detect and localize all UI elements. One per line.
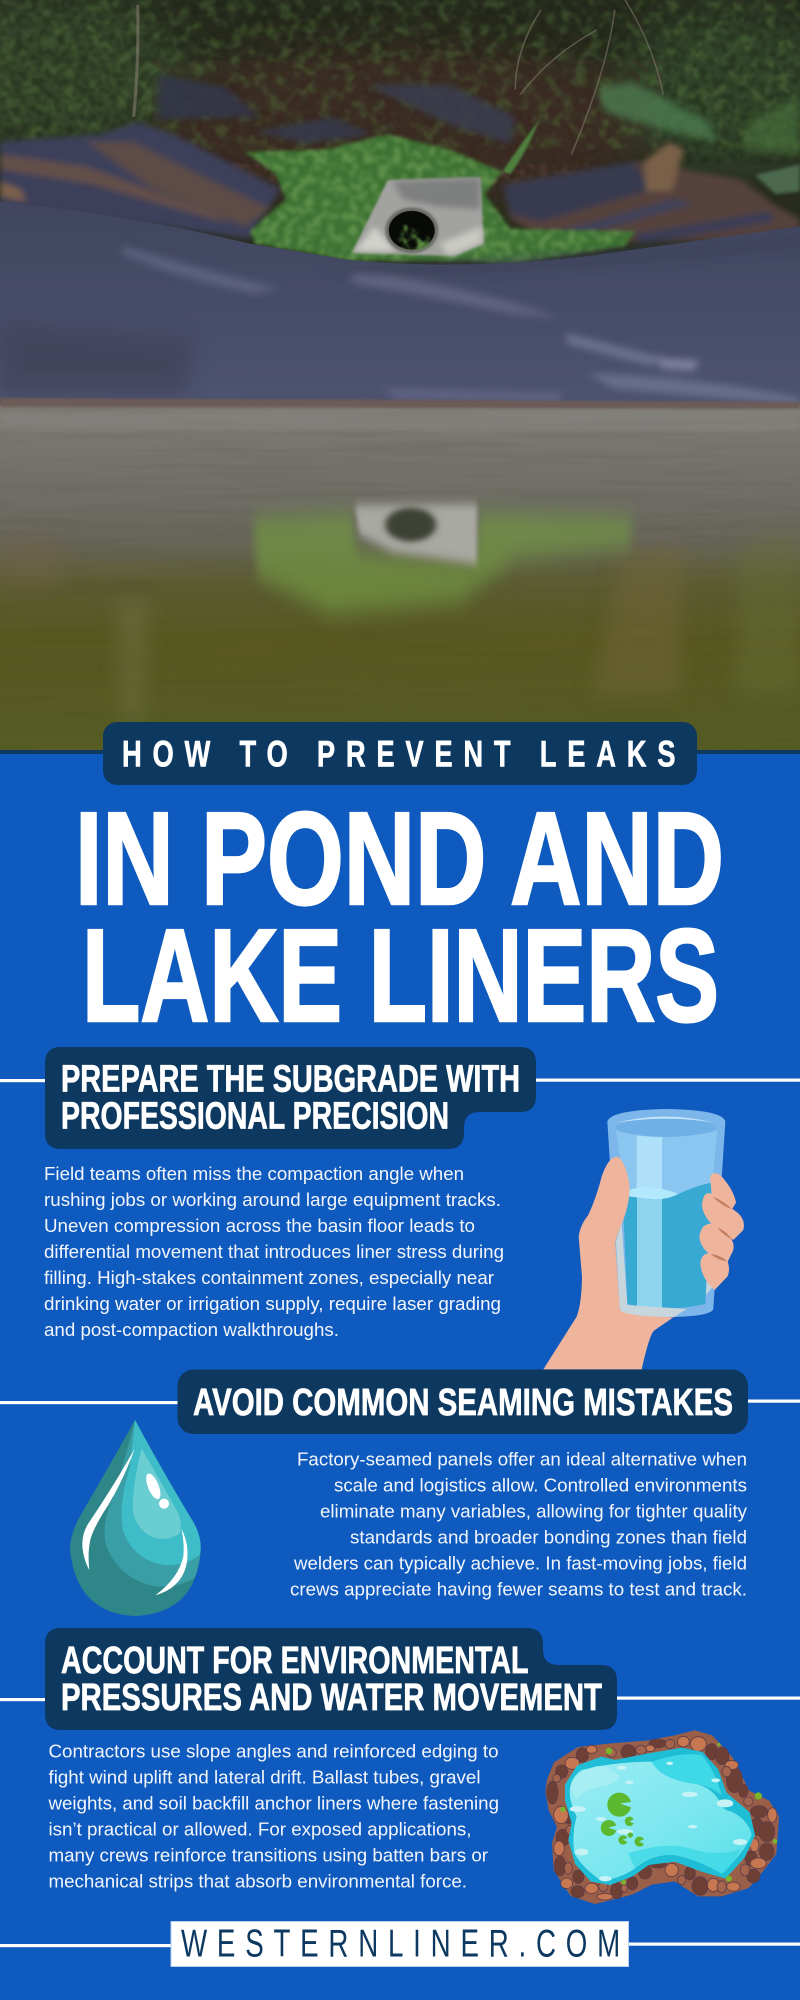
dark edge of the blue panel bbox=[0, 750, 800, 754]
section 3 heading: PRESSURES AND WATER MOVEMENT bbox=[61, 1677, 602, 1719]
section 1 body text: Uneven compression across the basin floor leads to bbox=[44, 1215, 475, 1236]
section 2 body text: standards and broader bonding zones than field bbox=[350, 1526, 747, 1548]
section 1 heading: PREPARE THE SUBGRADE WITH bbox=[61, 1058, 520, 1100]
vegetation around the pipe bbox=[245, 134, 635, 264]
section 1 body text: Field teams often miss the compaction angle when bbox=[44, 1163, 464, 1184]
liner wrinkles bbox=[122, 234, 800, 405]
section 3 heading bbox=[45, 1628, 617, 1730]
section 2 heading bbox=[178, 1370, 748, 1434]
lily pads bbox=[601, 1793, 644, 1847]
section 2 body text: crews appreciate having fewer seams to test and track. bbox=[290, 1578, 747, 1600]
section 1 body text: differential movement that introduces liner stress during bbox=[44, 1241, 504, 1262]
section 2 body text: eliminate many variables, allowing for tighter quality bbox=[320, 1500, 748, 1522]
hand bbox=[543, 1157, 744, 1369]
section 3 body text: Contractors use slope angles and reinforced edging to bbox=[48, 1740, 498, 1762]
section 3 body text: many crews reinforce transitions using batten bars or bbox=[48, 1844, 488, 1866]
stones bbox=[547, 1736, 777, 1900]
blue content panel bbox=[0, 754, 800, 2000]
section 1 heading: PROFESSIONAL PRECISION bbox=[61, 1096, 449, 1138]
section 3 body text bbox=[47, 1740, 499, 1892]
shoreline bbox=[0, 398, 800, 409]
vine climbing from the pipe bbox=[503, 119, 540, 174]
footer URL box: WESTERNLINER.COM bbox=[181, 1923, 620, 1966]
section 2 body text: welders can typically achieve. In fast-moving jobs, field bbox=[293, 1552, 747, 1574]
photo: lined pond with concrete outlet pipe bbox=[0, 0, 800, 754]
section 3 body text: fight wind uplift and lateral drift. Ballast tubes, gravel bbox=[48, 1766, 480, 1788]
subtitle badge bbox=[103, 722, 697, 785]
section 3 body text: weights, and soil backfill anchor liners where fastening bbox=[47, 1792, 499, 1814]
section 1 body text: and post-compaction walkthroughs. bbox=[44, 1319, 339, 1340]
fern and dry stems bbox=[597, 82, 800, 194]
section divider lines bbox=[0, 1078, 800, 1947]
section 3 heading: ACCOUNT FOR ENVIRONMENTAL bbox=[61, 1640, 528, 1682]
section 2 body text: Factory-seamed panels offer an ideal alternative when bbox=[297, 1448, 747, 1470]
grass tufts bbox=[560, 1743, 777, 1885]
front liner sheet bbox=[0, 201, 800, 404]
vegetation backdrop bbox=[0, 0, 800, 279]
section 1 body text: drinking water or irrigation supply, require laser grading bbox=[44, 1293, 501, 1314]
water bbox=[567, 1749, 753, 1883]
main title bbox=[75, 785, 724, 1049]
water reflection: pipe bbox=[355, 503, 477, 565]
section 3 body text: mechanical strips that absorb environmental force. bbox=[48, 1870, 467, 1892]
water reflection: vegetation bbox=[253, 512, 633, 614]
section 1 body text bbox=[44, 1163, 504, 1340]
section 1 body text: filling. High-stakes containment zones, especially near bbox=[44, 1267, 494, 1288]
section 2 body text bbox=[290, 1448, 748, 1600]
section 2 body text: scale and logistics allow. Controlled environments bbox=[334, 1474, 747, 1496]
section 3 body text: isn’t practical or allowed. For exposed applications, bbox=[48, 1818, 472, 1840]
section 1 body text: rushing jobs or working around large equipment tracks. bbox=[44, 1189, 501, 1210]
back liner panels bbox=[0, 75, 800, 244]
icon: water drop bbox=[70, 1420, 201, 1616]
section 1 heading bbox=[45, 1047, 536, 1149]
subtitle badge: HOW TO PREVENT LEAKS bbox=[122, 734, 676, 774]
water bbox=[0, 398, 800, 754]
concrete outlet bbox=[352, 177, 484, 256]
icon: hand holding glass of water bbox=[543, 1109, 744, 1369]
icon: pond with stones and lily pads bbox=[547, 1732, 778, 1903]
